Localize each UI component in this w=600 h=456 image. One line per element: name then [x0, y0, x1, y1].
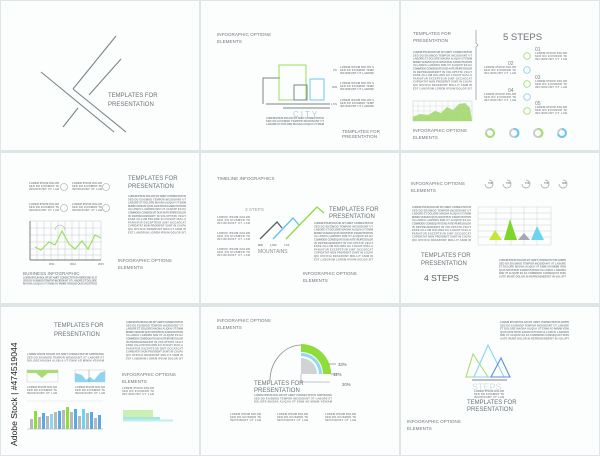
- panel: slide 2 city: LOREM IPSUM DOLOR S: [340, 65, 374, 69]
- panel: slide 3 five steps: ELEMENTS: [413, 135, 438, 140]
- panel: slide 8 radial chart: SED DO EIUSMOD TEMPOR INCIDIDUNT UT LABORE ET: [254, 396, 332, 400]
- panel: slide 3 five steps: 02: [508, 61, 514, 67]
- panel: slide 8 radial chart: INCIDIDUNT UT LAB: [325, 418, 356, 422]
- heading: TEMPLATES FOR: [54, 323, 104, 329]
- panel: slide 2 city: LABORE ET DOLORE MAGNA ALIQUA UT ENIM: [266, 122, 324, 126]
- icon: city buildings: [263, 65, 330, 108]
- panel: slide 3 five steps: ESSE CILLUM DOLORE EU FUGIAT NULLA: [413, 73, 472, 77]
- panel: slide 1 cover: [1, 1, 199, 150]
- icon: crossed lines: [41, 36, 126, 132]
- heading: INFOGRAPHIC OPTIONS: [217, 32, 271, 37]
- panel: slide 7 charts: ULLAMCO LABORIS NISI UT ALIQUIP EX EA: [126, 333, 183, 337]
- heading: PRESENTATION: [108, 102, 154, 108]
- panel: slide 6 four steps: SED DO EIUSMOD TEMPOR INCIDIDUNT UT: [412, 208, 471, 212]
- panel: slide 3 five steps: ULLAMCO LABORIS NISI UT ALIQUIP EX EA: [413, 63, 472, 67]
- panel: slide 7 charts: SED DO EIUSMOD TEMPOR INCIDIDUNT UT: [126, 323, 183, 327]
- panel: slide 5 timeline mountains: IN REPREHENDERIT IN VOLUPTATE VELIT: [314, 241, 373, 245]
- panel: slide 8 radial chart: DOLORE MAGNA ALIQUA UT ENIM AD MINIM VENIAM: [254, 400, 332, 404]
- panel: slide 2 city: LOREM IPSUM DOLOR S: [340, 81, 374, 85]
- heading: TEMPLATES FOR: [108, 93, 158, 99]
- panel: slide 5 timeline mountains: QUI OFFICIA DESERUNT MOLLIT ANIM ID: [314, 254, 373, 258]
- panel: slide 6 four steps: ESSE CILLUM DOLORE EU FUGIAT NULLA: [412, 228, 471, 232]
- panel: slide 2 city: PRESENTATION: [342, 134, 377, 139]
- panel: slide 2 city: 40%: [332, 85, 338, 89]
- panel: slide 5 timeline mountains: INCIDIDUNT UT LAB: [217, 221, 250, 225]
- panel: slide 5 timeline mountains: LOREM IPSUM DOLOR: [217, 215, 250, 219]
- panel: slide 4 business infographic: LOREM IPSUM DOLOR: [72, 181, 102, 185]
- panel: slide 5 timeline mountains: 3 STEPS: [245, 207, 264, 212]
- panel: slide 4 business infographic: SED DO EIUSMOD TE: [29, 205, 59, 209]
- panel: slide 2 city: INCIDIDUNT UT LABORE: [340, 71, 374, 75]
- panel: slide 4 business infographic: SED DO EIUSMOD TEMPOR INCIDIDUNT UT: [128, 197, 186, 201]
- panel: slide 8 radial chart: LOREM IPSUM DOLOR: [277, 412, 308, 416]
- panel: slide 3 five steps: LOREM IPSUM DOLOR: [535, 105, 567, 109]
- steps list: [524, 53, 530, 114]
- panel: slide 7 charts: IN REPREHENDERIT IN VOLUPTATE VELIT: [126, 340, 183, 344]
- panel: slide 6 four steps: PARIATUR EXCEPTEUR SINT OCCAECAT: [412, 231, 471, 235]
- panel: slide 2 city: CITY: [293, 110, 319, 119]
- panel: slide 4 business infographic: COMMODO CONSEQUAT DUIS AUTE IRURE DOLOR: [128, 210, 186, 214]
- panel: slide 5 timeline mountains: INFOGRAPHIC OPTIONS: [303, 271, 357, 276]
- radial chart: [270, 344, 351, 387]
- panel: slide 9 triangles: STEPS: [472, 382, 502, 392]
- panel: slide 7 charts: LOREM IPSUM DOLOR: [75, 385, 105, 389]
- panel: slide 6 four steps: 578: [544, 181, 549, 185]
- panel: slide 7 charts: PRESENTATION: [54, 332, 100, 338]
- panel: slide 4 business infographic: IN REPREHENDERIT IN VOLUPTATE VELIT: [128, 214, 186, 218]
- panel: slide 7 charts: EST LABORUM LOREM IPSUM DOLOR SIT: [126, 356, 183, 360]
- panel: slide 4 business infographic: ULLAMCO LABORIS NISI UT ALIQUIP EX EA: [128, 207, 186, 211]
- panel: slide 5 timeline mountains: ULLAMCO LABORIS NISI UT ALIQUIP EX EA: [314, 234, 373, 238]
- panel: slide 9 triangles: SED DO EIUSMOD TEMPOR INCIDIDUNT UT LABORE: [500, 323, 569, 327]
- panel: slide 4 business infographic: LOREM IPSUM DOLOR SIT AMET CONSECTETUR ADIPISCING ELIT: [23, 276, 97, 280]
- panel: slide 7 charts: LOREM IPSUM DOLOR SIT AMET CONSECTETUR ADIPISCING: [27, 352, 104, 356]
- panel: slide 6 four steps: NISI UT ALIQUIP EX EA COMMODO CONSEQUAT DUIS: [499, 271, 566, 275]
- panel: slide 3 five steps: SED DO EIUSMOD TEMPOR INCIDIDUNT UT: [413, 53, 472, 57]
- panel: slide 9 triangles: TEMPLATES FOR: [467, 400, 517, 406]
- panel: slide 5 timeline mountains: INCIDIDUNT UT LAB: [217, 237, 250, 241]
- panel: slide 5 timeline mountains: MIN: [258, 243, 263, 247]
- cone chart: [478, 207, 551, 245]
- panel: slide 7 charts: COMMODO CONSEQUAT DUIS AUTE IRURE DOLOR: [126, 336, 183, 340]
- panel: slide 2 city: [201, 1, 399, 150]
- panel: slide 9 triangles: PRESENTATION: [467, 407, 513, 413]
- panel: slide 9 triangles: INCIDIDUNT UT LAB: [474, 395, 504, 399]
- panel: slide 5 timeline mountains: SED DO EIUSMOD TE: [217, 218, 250, 222]
- panel: slide 8 radial chart: SED DO EIUSMOD TE: [230, 415, 261, 419]
- panel: slide 4 business infographic: BUSINESS INFOGRAPHIC: [23, 271, 80, 276]
- panel: slide 3 five steps: 04: [508, 88, 514, 94]
- panel: slide 3 five steps: LOREM IPSUM DOLOR SIT AMET CONSECTETUR: [413, 50, 472, 54]
- panel: slide 7 charts: SED DO EIUSMOD TE: [75, 388, 105, 392]
- panel: slide 6 four steps: AUTE IRURE DOLOR IN REPREHENDERIT IN VOLUPT: [499, 274, 566, 278]
- panel: slide 4 business infographic: SED DO EIUSMOD TE: [72, 184, 102, 188]
- radial chart: 12%: [333, 372, 342, 377]
- heading: TIMELINE INFOGRAPHICS: [217, 176, 274, 181]
- panel: slide 3 five steps: PRESENTATION: [413, 38, 448, 43]
- panel: slide 3 five steps: EST LABORUM LOREM IPSUM DOLOR SIT: [413, 86, 472, 90]
- panel: slide 6 four steps: CUPIDATAT NON PROIDENT SUNT IN CULPA: [412, 235, 471, 239]
- small area charts: [27, 370, 105, 382]
- panel: slide 4 business infographic: SED DO EIUSMOD TEMPOR INCIDIDUNT UT LABORE ET DOLORE: [23, 278, 97, 282]
- panel: slide 3 five steps: SED DO EIUSMOD TE: [484, 68, 516, 72]
- panel: slide 3 five steps: SED DO EIUSMOD TE: [535, 82, 567, 86]
- panel: slide 3 five steps: CUPIDATAT NON PROIDENT SUNT IN CULPA: [413, 80, 472, 84]
- panel: slide 3 five steps: LABORE ET DOLORE MAGNA ALIQUA UT ENIM: [413, 57, 472, 61]
- panel: slide 7 charts: QUI OFFICIA DESERUNT MOLLIT ANIM ID: [126, 353, 183, 357]
- panel: slide 5 timeline mountains: SED DO EIUSMOD TE: [217, 250, 250, 254]
- panel: slide 3 five steps: SED DO EIUSMOD TE: [484, 95, 516, 99]
- panel: slide 7 charts: DOLORE MAGNA ALIQUA UT ENIM AD MINIM VENIAM: [27, 359, 104, 363]
- panel: slide 3 five steps: IN REPREHENDERIT IN VOLUPTATE VELIT: [413, 70, 472, 74]
- panel: slide 7 charts: SED DO EIUSMOD TE: [27, 388, 57, 392]
- panel: slide 5 timeline mountains: LOREM IPSUM DOLOR SIT AMET CONSECTETUR: [314, 221, 373, 225]
- panel: slide 3 five steps: INCIDIDUNT UT LAB: [535, 111, 567, 115]
- panel: slide 7 charts: LOREM IPSUM DOLOR SIT AMET CONSECTETUR: [126, 320, 183, 324]
- panel: slide 3 five steps: INFOGRAPHIC OPTIONS: [413, 128, 467, 133]
- panel: slide 8 radial chart: ELEMENTS: [217, 325, 242, 330]
- panel: slide 6 four steps: [401, 153, 599, 303]
- panel: slide 9 triangles: ELEMENTS: [407, 426, 432, 431]
- panel: slide 2 city: TEMPLATES FOR: [342, 129, 381, 134]
- panel: slide 3 five steps: MINIM VENIAM QUIS NOSTRUD EXERCITATION: [413, 60, 472, 64]
- radial chart: 20%: [342, 382, 351, 387]
- panel: slide 2 city: SED DO EIUSMOD TEMPOR INCIDIDUNT UT: [266, 119, 324, 123]
- area chart: [413, 101, 472, 121]
- panel: slide 6 four steps: 608: [562, 181, 567, 185]
- panel: slide 7 charts: ELEMENTS: [122, 379, 147, 384]
- panel: slide 6 four steps: IN REPREHENDERIT IN VOLUPTATE VELIT: [412, 225, 471, 229]
- panel: slide 8 radial chart: LOREM IPSUM DOLOR: [325, 412, 356, 416]
- panel: slide 6 four steps: LOREM IPSUM DOLOR SIT AMET CONSECTETUR: [412, 205, 471, 209]
- panel: slide 4 business infographic: SED DO EIUSMOD TE: [29, 184, 59, 188]
- panel: slide 5 timeline mountains: ESSE CILLUM DOLORE EU FUGIAT NULLA: [314, 244, 373, 248]
- panel: slide 9 triangles: QUIS NOSTRUD EXERCITATION ULLAMCO LABORIS: [500, 330, 569, 334]
- panel: slide 6 four steps: COMMODO CONSEQUAT DUIS AUTE IRURE DOLOR: [412, 222, 471, 226]
- panel: slide 3 five steps: SED DO EIUSMOD TE: [535, 54, 567, 58]
- panel: slide 3 five steps: LOREM IPSUM DOLOR: [484, 92, 516, 96]
- panel: slide 4 business infographic: LOREM IPSUM DOLOR SIT AMET CONSECTETUR: [128, 194, 186, 198]
- panel: slide 4 business infographic: LOREM IPSUM DOLOR: [72, 202, 102, 206]
- panel: slide 3 five steps: PARIATUR EXCEPTEUR SINT OCCAECAT: [413, 76, 472, 80]
- panel: slide 9 triangles: NISI UT ALIQUIP EX EA COMMODO CONSEQUAT DUIS: [500, 333, 569, 337]
- panel: slide 3 five steps: INCIDIDUNT UT LAB: [535, 57, 567, 61]
- panel: slide 7 charts: INFOGRAPHIC OPTIONS: [122, 372, 176, 377]
- line chart: [30, 221, 104, 266]
- panel: slide 4 business infographic: LOREM IPSUM DOLOR: [29, 202, 59, 206]
- panel: slide 4 business infographic: SED DO EIUSMOD TE: [72, 205, 102, 209]
- panel: slide 5 timeline mountains: EST LABORUM LOREM IPSUM DOLOR SIT: [314, 257, 373, 261]
- panel: slide 5 timeline mountains: 1,500: [270, 243, 277, 247]
- panel: slide 7 charts: INCIDIDUNT UT LAB: [27, 391, 57, 395]
- panel: slide 4 business infographic: PRESENTATION: [128, 184, 174, 190]
- panel: slide 3 five steps: INCIDIDUNT UT LAB: [535, 85, 567, 89]
- panel: slide 9 triangles: INFOGRAPHIC OPTIONS: [407, 419, 461, 424]
- panel: slide 4 business infographic: MAGNA ALIQUA UT ENIM AD MINIM VENIAM QUIS NOSTRUD: [23, 282, 97, 286]
- panel: slide 2 city: 1.5%: [331, 102, 338, 106]
- bar chart: [27, 401, 103, 429]
- panel: slide 8 radial chart: PRESENTATION: [254, 388, 300, 394]
- panel: slide 7 charts: SED DO EIUSMOD TE: [122, 389, 154, 393]
- panel: slide 6 four steps: TEMPLATES FOR: [421, 253, 471, 259]
- panel: slide 9 triangles: SED DO EIUSMOD TE: [474, 392, 504, 396]
- panel: slide 6 four steps: ULLAMCO LABORIS NISI UT ALIQUIP EX EA: [412, 218, 471, 222]
- panel: slide 7 charts: MINIM VENIAM QUIS NOSTRUD EXERCITATION: [126, 330, 183, 334]
- panel: slide 2 city: SED DO EIUSMOD TEMP: [340, 84, 374, 88]
- panel: slide 8 radial chart: [201, 307, 399, 455]
- panel: slide 6 four steps: 708: [488, 181, 493, 185]
- panel: slide 3 five steps: INCIDIDUNT UT LAB: [484, 98, 516, 102]
- line chart: 2015: [98, 262, 104, 266]
- panel: slide 6 four steps: ET DOLORE MAGNA ALIQUA UT ENIM AD MINIM VENI: [499, 265, 566, 269]
- panel: slide 6 four steps: 576: [525, 181, 530, 185]
- panel: slide 7 charts: CUPIDATAT NON PROIDENT SUNT IN CULPA: [126, 350, 183, 354]
- panel: slide 3 five steps: [401, 1, 599, 150]
- heading: INFOGRAPHIC OPTIONS: [411, 181, 465, 186]
- panel: slide 5 timeline mountains: SED DO EIUSMOD TEMPOR INCIDIDUNT UT: [314, 224, 373, 228]
- line chart: 2013: [70, 262, 76, 266]
- panel: slide 2 city: INCIDIDUNT UT LABORE: [340, 87, 374, 91]
- panel: slide 4 business infographic: ESSE CILLUM DOLORE EU FUGIAT NULLA: [128, 217, 186, 221]
- watermark label: vertical stock id: Adobe Stock | #474519044: [9, 342, 19, 446]
- panel: slide 8 radial chart: LOREM IPSUM DOLOR SIT AMET CONSECTETUR ADIPISCING: [254, 393, 332, 397]
- panel: slide 3 five steps: LOREM IPSUM DOLOR: [535, 79, 567, 83]
- panel: slide 5 timeline mountains: ELEMENTS: [303, 278, 328, 283]
- panel: slide 6 four steps: MINIM VENIAM QUIS NOSTRUD EXERCITATION: [412, 215, 471, 219]
- panel: slide 6 four steps: QUIS NOSTRUD EXERCITATION ULLAMCO LABORIS: [499, 268, 566, 272]
- panel: slide 2 city: 7%: [333, 68, 337, 72]
- panel: slide 5 timeline mountains: MOUNTAINS: [258, 249, 288, 255]
- panel: slide 2 city: ELEMENTS: [217, 39, 242, 44]
- panel: slide 7 charts: INCIDIDUNT UT LAB: [75, 391, 105, 395]
- panel: slide 7 charts: ESSE CILLUM DOLORE EU FUGIAT NULLA: [126, 343, 183, 347]
- panel: slide 7 charts: LOREM IPSUM DOLOR: [27, 385, 57, 389]
- panel: slide 9 triangles: LOREM IPSUM DOLOR SIT AMET CONSECTETUR ADIPIS: [500, 320, 569, 324]
- panel: slide 8 radial chart: INCIDIDUNT UT LAB: [230, 418, 261, 422]
- panel: slide 2 city: INCIDIDUNT UT LABORE: [340, 104, 374, 108]
- panel: slide 4 business infographic: INCIDIDUNT UT LAB: [29, 187, 59, 191]
- panel: slide 7 charts: INCIDIDUNT UT LAB: [122, 392, 154, 396]
- radial chart: 33%: [338, 362, 347, 367]
- panel: slide 6 four steps: LABORE ET DOLORE MAGNA ALIQUA UT ENIM: [412, 212, 471, 216]
- panel: slide 9 triangles: ET DOLORE MAGNA ALIQUA UT ENIM AD MINIM VENI: [500, 327, 569, 331]
- panel: slide 5 timeline mountains: PRESENTATION: [329, 214, 375, 220]
- panel: slide 4 business infographic: INCIDIDUNT UT LAB: [72, 208, 102, 212]
- panel: slide 4 business infographic: CUPIDATAT NON PROIDENT SUNT IN CULPA: [128, 224, 186, 228]
- panel: slide 6 four steps: PRESENTATION: [421, 261, 467, 267]
- panel: slide 4 business infographic: LABORE ET DOLORE MAGNA ALIQUA UT ENIM: [128, 201, 186, 205]
- heading: TEMPLATES FOR: [413, 31, 452, 36]
- panel: slide 3 five steps: LOREM IPSUM DOLOR: [484, 65, 516, 69]
- panel: slide 5 timeline mountains: MINIM VENIAM QUIS NOSTRUD EXERCITATION: [314, 231, 373, 235]
- panel: slide 3 five steps: COMMODO CONSEQUAT DUIS AUTE IRURE DOLOR: [413, 66, 472, 70]
- icon: triangles: [466, 345, 510, 380]
- panel: slide 4 business infographic: QUI OFFICIA DESERUNT MOLLIT ANIM ID: [128, 227, 186, 231]
- panel: slide 9 triangles: AUTE IRURE DOLOR IN REPREHENDERIT IN VOLUPT: [500, 336, 569, 340]
- heading: [108, 93, 158, 108]
- panel: slide 4 business infographic: EST LABORUM LOREM IPSUM DOLOR SIT: [128, 230, 186, 234]
- panel: slide 7 charts: [1, 307, 199, 455]
- panel: slide 3 five steps: LOREM IPSUM DOLOR: [535, 51, 567, 55]
- heading: 4 steps: 4 STEPS: [424, 273, 459, 283]
- panel: slide 6 four steps: QUI OFFICIA DESERUNT MOLLIT ANIM ID: [412, 238, 471, 242]
- panel: slide 5 timeline mountains: LOREM IPSUM DOLOR: [217, 231, 250, 235]
- panel: slide 9 triangles: LOREM IPSUM DOLOR: [474, 389, 504, 393]
- panel: slide 7 charts: PARIATUR EXCEPTEUR SINT OCCAECAT: [126, 346, 183, 350]
- panel: slide 7 charts: SED DO EIUSMOD TEMPOR INCIDIDUNT UT LABORE ET: [27, 355, 104, 359]
- panel: slide 4 business infographic: LOREM IPSUM DOLOR: [29, 181, 59, 185]
- panel: slide 2 city: LOREM IPSUM DOLOR SIT AMET CONSECTETUR: [266, 116, 324, 120]
- panel: slide 6 four steps: 760: [506, 181, 511, 185]
- panel: slide 5 timeline mountains: SED DO EIUSMOD TE: [217, 234, 250, 238]
- panel: slide 8 radial chart: SED DO EIUSMOD TE: [277, 415, 308, 419]
- panel: slide 8 radial chart: LOREM IPSUM DOLOR: [230, 412, 261, 416]
- panel: slide 6 four steps: LOREM IPSUM DOLOR SIT AMET CONSECTETUR ADIPIS: [499, 258, 566, 262]
- panel: slide 3 five steps: 05: [535, 101, 541, 107]
- panel: slide 8 radial chart: INCIDIDUNT UT LAB: [277, 418, 308, 422]
- panel: slide 5 timeline mountains: COMMODO CONSEQUAT DUIS AUTE IRURE DOLOR: [314, 238, 373, 242]
- panel: slide 3 five steps: 03: [535, 75, 541, 81]
- panel: slide 6 four steps: SED DO EIUSMOD TEMPOR INCIDIDUNT UT LABORE: [499, 261, 566, 265]
- panel: slide 3 five steps: QUI OFFICIA DESERUNT MOLLIT ANIM ID: [413, 83, 472, 87]
- panel: slide 7 charts: LABORE ET DOLORE MAGNA ALIQUA UT ENIM: [126, 327, 183, 331]
- panel: slide 4 business infographic: ELEMENTS: [118, 265, 143, 270]
- panel: slide 8 radial chart: SED DO EIUSMOD TE: [325, 415, 356, 419]
- heading: TEMPLATES FOR: [128, 176, 178, 182]
- panel: slide 2 city: SED DO EIUSMOD TEMP: [340, 101, 374, 105]
- panel: slide 5 timeline mountains: [201, 153, 399, 303]
- panel: slide 2 city: SED DO EIUSMOD TEMP: [340, 68, 374, 72]
- panel: slide 5 timeline mountains: INCIDIDUNT UT LAB: [217, 253, 250, 257]
- panel: slide 3 five steps: 01: [535, 47, 541, 53]
- panel: slide 4 business infographic: [1, 153, 199, 303]
- panel: slide 5 timeline mountains: LOREM IPSUM DOLOR: [217, 247, 250, 251]
- panel: slide 5 timeline mountains: TEMPLATES FOR: [329, 207, 379, 213]
- panel: slide 9 triangles: [401, 307, 599, 455]
- panel: slide 4 business infographic: PARIATUR EXCEPTEUR SINT OCCAECAT: [128, 220, 186, 224]
- panel: slide 5 timeline mountains: PARIATUR EXCEPTEUR SINT OCCAECAT: [314, 247, 373, 251]
- panel: slide 4 business infographic: INCIDIDUNT UT LAB: [29, 208, 59, 212]
- panel: slide 3 five steps: INCIDIDUNT UT LAB: [484, 71, 516, 75]
- horizontal bars: [123, 410, 173, 422]
- line chart: 2011: [49, 262, 55, 266]
- panel: slide 3 five steps: SED DO EIUSMOD TE: [535, 108, 567, 112]
- panel: slide 6 four steps: ELEMENTS: [411, 188, 436, 193]
- panel: slide 2 city: LOREM IPSUM DOLOR S: [340, 98, 374, 102]
- heading: INFOGRAPHIC OPTIONS: [217, 318, 271, 323]
- panel: slide 4 business infographic: INFOGRAPHIC OPTIONS: [118, 258, 172, 263]
- panel: slide 7 charts: LOREM IPSUM DOLOR: [122, 386, 154, 390]
- panel: slide 4 business infographic: INCIDIDUNT UT LAB: [72, 187, 102, 191]
- panel: slide 5 timeline mountains: LABORE ET DOLORE MAGNA ALIQUA UT ENIM: [314, 228, 373, 232]
- panel: slide 5 timeline mountains: 7.1K: [284, 243, 290, 247]
- icon: mountains: [260, 207, 324, 239]
- panel: slide 5 timeline mountains: CUPIDATAT NON PROIDENT SUNT IN CULPA: [314, 251, 373, 255]
- panel: slide 8 radial chart: TEMPLATES FOR: [254, 381, 304, 387]
- panel: slide 4 business infographic: MINIM VENIAM QUIS NOSTRUD EXERCITATION: [128, 204, 186, 208]
- heading: 5 steps: 5 STEPS: [503, 32, 542, 43]
- donut icons: [486, 129, 566, 137]
